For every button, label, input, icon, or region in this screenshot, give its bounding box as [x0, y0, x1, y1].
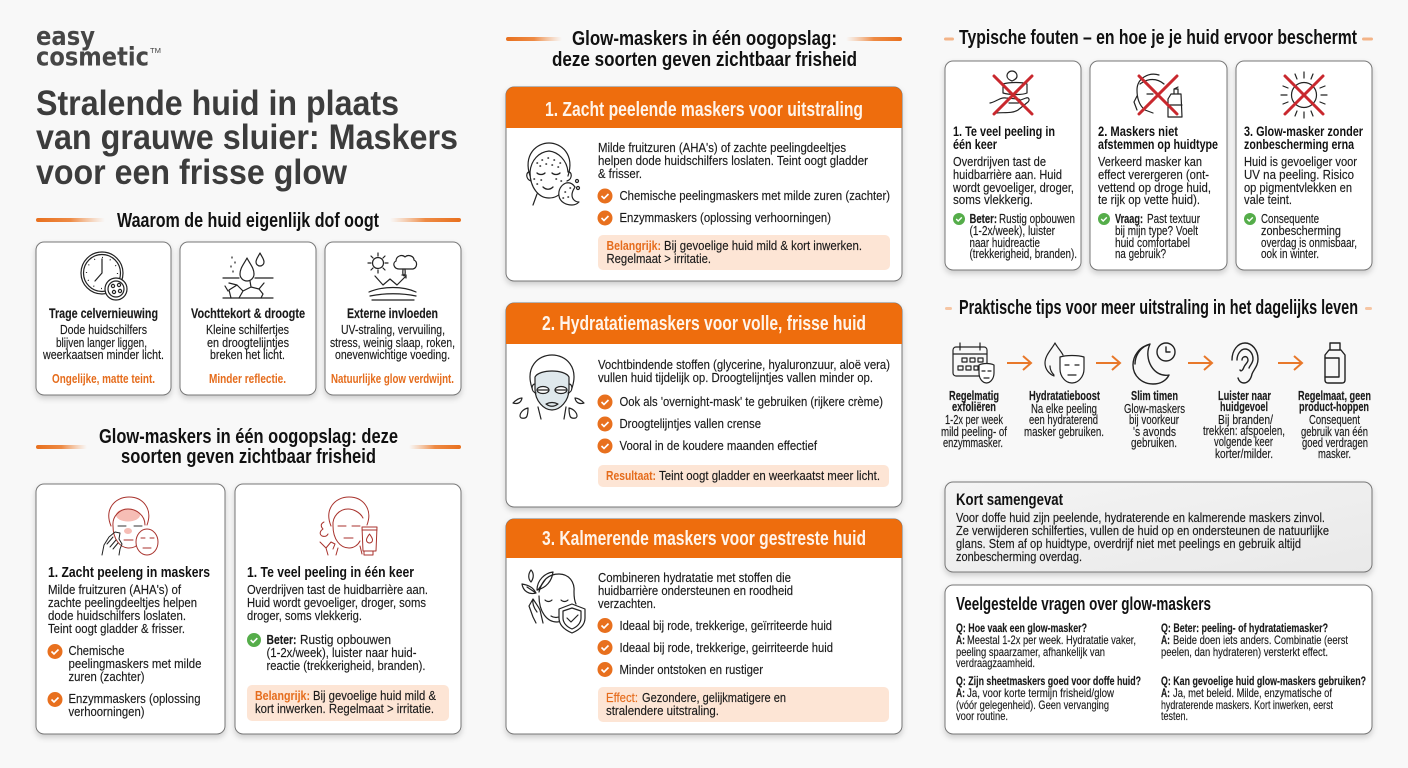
title [36, 84, 458, 192]
heading: glow-maskers links [36, 426, 461, 468]
panel: trage celvernieuwing: weerkaatsen minder licht. [42, 347, 164, 362]
icon: face with peeling dots and pad [527, 143, 580, 205]
tip 5: regelmaat, geen product-hoppen: masker. [1318, 447, 1351, 461]
logo: easy cosmetic: TM [150, 48, 161, 55]
panel: fout 2: Verkeerd masker kan [1098, 154, 1202, 169]
panel: zacht peeleng in maskers: peelingmaskers met milde [68, 656, 202, 671]
header bar 2 [506, 303, 902, 344]
title: Stralende huid in plaats [36, 84, 399, 123]
faq 4: hydraterende maskers. Kort inwerken, eerst [1161, 698, 1333, 712]
faq 3: peelen, dan hydrateren) versterkt effect. [1161, 645, 1328, 659]
callout: belangrijk midden: Regelmaat > irritatie. [606, 251, 711, 266]
heading: glow-maskers links: soorten geven zichtbaar frisheid [121, 446, 376, 468]
header bar 1: 1. Zacht peelende maskers voor uitstraling [545, 99, 863, 121]
panel: fout 1: Rustig opbouwen [999, 212, 1075, 226]
panel: kort samengevat: Ze verwijderen schilferties, vullen de huid op en ondersteunen de natuurlijke [956, 523, 1329, 538]
panel: zacht peeleng in maskers: dode huidschilfers loslaten. [48, 608, 186, 623]
callout: resultaat: Resultaat: [606, 468, 656, 483]
icon: face with leaves and shield [522, 570, 585, 633]
panel: hydratatiemaskers: Vooral in de koudere maanden effectief [620, 438, 817, 453]
faq 4: Ja, met beleid. Milde, enzymatische of [1173, 686, 1333, 700]
panel: trage celvernieuwing [36, 242, 171, 395]
panel: zacht peeleng in maskers: Milde fruitzuren (AHA's) of [48, 582, 181, 597]
panel: fout 1 [945, 61, 1081, 270]
panel: zacht peelende maskers: Milde fruitzuren (AHA's) of zachte peelingdeeltjes [598, 140, 846, 155]
panel: kalmerende maskers [506, 519, 902, 734]
panel: te veel peeling in een keer: Huid wordt gevoeliger, droger, soms [247, 595, 426, 610]
faq 3: Q: Beter: peeling- of hydratatiemasker? [1161, 621, 1328, 635]
arrow 3 [1188, 356, 1212, 370]
panel: kalmerende maskers: huidbarrière ondersteunen en roodheid [598, 583, 793, 598]
icon: face and bottle crossed out [1134, 74, 1182, 117]
tip 5: regelmaat, geen product-hoppen: Consequent [1309, 413, 1360, 427]
panel: hydratatiemaskers [506, 303, 902, 507]
callout: belangrijk: kort inwerken. Regelmaat > irritatie. [255, 701, 434, 716]
panel: te veel peeling in een keer: Beter: [266, 632, 296, 647]
icon: hand with jar crossed out [990, 71, 1032, 114]
callout: belangrijk midden [598, 235, 890, 270]
panel: te veel peeling in een keer: Overdrijven tast de huidbarrière aan. [247, 582, 428, 597]
tip 3: slim timen: Slim timen [1131, 389, 1178, 403]
callout: effect: stralendere uitstraling. [606, 703, 719, 718]
tip 1: regelmatig exfoliëren [941, 343, 1007, 450]
heading: waarom de huid dof oogt: Waarom de huid eigenlijk dof oogt [117, 210, 379, 232]
callout: belangrijk [247, 685, 449, 721]
faq 1: Meestal 1-2x per week. Hydratatie vaker, [967, 633, 1136, 647]
icon: face with hydrating mask and drops [513, 355, 584, 419]
tip 4: luister naar huidgevoel: Luister naar [1218, 389, 1271, 403]
panel: fout 3: overdag is onmisbaar, [1261, 236, 1357, 250]
panel: fout 1: naar huidreactie [970, 236, 1040, 250]
panel: zacht peeleng in maskers: Enzymmaskers (oplossing [68, 691, 200, 706]
panel: fout 3: UV na peeling. Risico [1244, 167, 1354, 182]
icon: drop with mask [1045, 343, 1084, 383]
header bar 3 [506, 519, 902, 558]
panel: fout 3: zonbescherming erna [1244, 137, 1354, 152]
panel: zacht peelende maskers: Enzymmaskers (oplossing verhoorningen) [620, 210, 831, 225]
faq 2: voor routine. [956, 709, 1008, 723]
callout: belangrijk midden: Belangrijk: [606, 238, 661, 253]
tip 1: regelmatig exfoliëren: mild peeling- of [941, 425, 1007, 439]
panel: fout 1: (trekkerigheid, branden). [970, 247, 1077, 261]
faq 2 [956, 674, 1141, 723]
panel: fout 2: Past textuur [1147, 212, 1200, 226]
panel: externe invloeden: stress, weinig slaap, roken, [330, 335, 455, 350]
arrow 1 [1007, 356, 1031, 370]
heading: glow-maskers midden: deze soorten geven zichtbaar frisheid [552, 49, 857, 71]
tip 2: hydratatieboost [1024, 343, 1104, 439]
panel: kalmerende maskers: verzachten. [598, 596, 656, 611]
panel: fout 2: na gebruik? [1115, 247, 1166, 261]
panel: hydratatiemaskers: Droogtelijntjes vallen crense [620, 416, 761, 431]
panel: fout 2: 2. Maskers niet [1098, 124, 1178, 139]
panel: te veel peeling in een keer: (1-2x/week), luister naar huid- [266, 645, 416, 660]
panel: zacht peelende maskers: & frisser. [598, 166, 642, 181]
arrow 2 [1096, 356, 1120, 370]
panel: fout 3: op pigmentvlekken en [1244, 180, 1352, 195]
panel: kort samengevat: Voor doffe huid zijn peelende, hydraterende en kalmerende maskers zinvol. [956, 510, 1325, 525]
tip 5: regelmaat, geen product-hoppen [1298, 343, 1371, 461]
icon: bottle [1325, 343, 1345, 383]
panel: externe invloeden: Natuurlijke glow verdwijnt. [331, 371, 454, 386]
tip 2: hydratatieboost: een hydraterend [1029, 413, 1098, 427]
panel: zacht peelende maskers: helpen dode huidschilfers loslaten. Teint oogt gladder [598, 153, 869, 168]
tip 5: regelmaat, geen product-hoppen: product-hoppen [1299, 400, 1369, 414]
panel: fout 2: te rijk op vette huid). [1098, 192, 1200, 207]
tip 3: slim timen [1124, 343, 1185, 450]
callout: belangrijk: Belangrijk: [255, 688, 310, 703]
faq 1 [956, 621, 1136, 670]
panel: externe invloeden: Externe invloeden [347, 306, 438, 321]
tip 4: luister naar huidgevoel [1203, 343, 1285, 461]
arrow 4 [1278, 356, 1302, 370]
tip 1: regelmatig exfoliëren: 1-2x per week [945, 413, 1004, 427]
panel: fout 2: bij mijn type? Voelt [1115, 224, 1198, 238]
panel: vochttekort en droogte: Minder reflectie. [209, 371, 286, 386]
panel: fout 1: 1. Te veel peeling in [953, 124, 1055, 139]
panel: te veel peeling in een keer: reactie (trekkerigheid, branden). [266, 658, 426, 673]
panel: vochttekort en droogte: Kleine schilfertjes [206, 322, 289, 337]
panel: fout 2: vettend op droge huid, [1098, 180, 1211, 195]
callout: effect: Effect: [606, 690, 638, 705]
icon: red face with tube and leaves [320, 497, 377, 555]
faq 2: Q: Zijn sheetmaskers goed voor doffe huid? [956, 674, 1141, 688]
panel: zacht peeleng in maskers: Chemische [68, 643, 124, 658]
icon: clock with cells [81, 252, 127, 300]
panel: trage celvernieuwing: Trage celvernieuwing [49, 306, 158, 321]
panel: hydratatiemaskers: Ook als 'overnight-mask' te gebruiken (rijkere crème) [620, 394, 883, 409]
icon: calendar with mask [953, 343, 994, 383]
panel: vochttekort en droogte: breken het licht. [210, 347, 285, 362]
tip 2: hydratatieboost: Na elke peeling [1031, 402, 1097, 416]
panel: fout 2: huid comfortabel [1115, 236, 1190, 250]
tip 1: regelmatig exfoliëren: exfoliëren [952, 400, 996, 414]
heading: glow-maskers midden: Glow-maskers in één oogopslag: [572, 28, 837, 50]
panel: vochttekort en droogte [180, 242, 316, 395]
tip 2: hydratatieboost: Hydratatieboost [1029, 389, 1101, 403]
panel: fout 3 [1236, 61, 1372, 270]
tip 4: luister naar huidgevoel: volgende keer [1214, 435, 1273, 449]
tip 5: regelmaat, geen product-hoppen: Regelmaat, geen [1298, 389, 1371, 403]
panel: trage celvernieuwing: blijven langer liggen, [56, 335, 147, 350]
panel: fout 1: huidbarrière aan. Huid [953, 167, 1062, 182]
panel: externe invloeden [325, 242, 461, 395]
icon: ear [1232, 343, 1258, 383]
panel: fout 3: 3. Glow-masker zonder [1244, 124, 1364, 139]
heading: glow-maskers midden [506, 28, 902, 71]
panel: zacht peeleng in maskers: verhoorningen) [68, 704, 144, 719]
panel: zacht peeleng in maskers: 1. Zacht peeleng in maskers [48, 565, 210, 581]
panel: kalmerende maskers: Ideaal bij rode, trekkerige, geirriteerde huid [620, 640, 833, 655]
panel: zacht peeleng in maskers: Teint oogt gladder & frisser. [48, 621, 185, 636]
faq 4 [1161, 674, 1366, 723]
panel: fout 1: één keer [953, 137, 998, 152]
panel: fout 1: soms vlekkerig. [953, 192, 1033, 207]
callout: resultaat: Teint oogt gladder en weerkaatst meer licht. [659, 468, 880, 483]
panel: fout 1: Beter: [970, 212, 997, 226]
tip 3: slim timen: Glow-maskers [1124, 402, 1185, 416]
faq 1: verdraagzaamheid. [956, 656, 1035, 670]
panel: veelgestelde vragen [945, 585, 1372, 734]
heading: glow-maskers links: Glow-maskers in één oogopslag: deze [99, 426, 398, 448]
panel: fout 2: effect verergeren (ont- [1098, 167, 1209, 182]
faq 4: A: [1161, 686, 1170, 700]
tip 4: luister naar huidgevoel: trekken: afspoelen, [1203, 424, 1285, 438]
panel: te veel peeling in een keer: 1. Te veel peeling in één keer [247, 565, 414, 581]
panel: kort samengevat: glans. Stem af op huidtype, overdrijf niet met peelings en gebruik altijd [956, 536, 1301, 551]
panel: fout 2 [1090, 61, 1227, 270]
panel: zacht peelende maskers [506, 87, 902, 281]
panel: te veel peeling in een keer: Rustig opbouwen [300, 632, 391, 647]
panel: veelgestelde vragen: Veelgestelde vragen over glow-maskers [956, 594, 1211, 614]
header bar 2: 2. Hydratatiemaskers voor volle, frisse huid [542, 313, 866, 335]
panel: vochttekort en droogte: Vochttekort & droogte [191, 306, 305, 321]
icon: sun, cloud and skin [368, 253, 417, 300]
faq 2: Ja, voor korte termijn frisheid/glow [967, 686, 1114, 700]
panel: vochttekort en droogte: en droogtelijntjes [207, 335, 289, 350]
logo: easy cosmetic: cosmetic [36, 42, 149, 72]
icon: sun crossed out [1281, 72, 1327, 118]
faq 1: A: [956, 633, 965, 647]
tip 1: regelmatig exfoliëren: enzymmasker. [943, 436, 1003, 450]
panel: kort samengevat [945, 482, 1372, 572]
panel: hydratatiemaskers: Vochtbindende stoffen (glycerine, hyaluronzuur, aloë vera) [598, 357, 890, 372]
tip 3: slim timen: bij voorkeur [1129, 413, 1179, 427]
tip 4: luister naar huidgevoel: huidgevoel [1220, 400, 1268, 414]
panel: externe invloeden: onevenwichtige voeding. [335, 347, 450, 362]
callout: effect: Gezondere, gelijkmatigere en [642, 690, 786, 705]
title: voor een frisse glow [36, 153, 348, 192]
callout: belangrijk midden: Bij gevoelige huid mild & kort inwerken. [664, 238, 862, 253]
panel: fout 3: zonbescherming [1261, 224, 1341, 238]
panel: fout 1: (1-2x/week), luister [970, 224, 1055, 238]
icon: moon with clock [1133, 343, 1175, 384]
tip 1: regelmatig exfoliëren: Regelmatig [949, 389, 999, 403]
tip 5: regelmaat, geen product-hoppen: goed verdragen [1302, 436, 1368, 450]
callout: effect [598, 687, 889, 722]
tip 3: slim timen: gebruiken. [1131, 436, 1177, 450]
panel: zacht peeleng in maskers: zachte peelingdeeltjes helpen [48, 595, 197, 610]
logo: easy cosmetic [36, 22, 161, 72]
panel: trage celvernieuwing: Dode huidschilfers [60, 322, 147, 337]
panel: te veel peeling in een keer: droger, soms vlekkerig. [247, 608, 362, 623]
panel: zacht peelende maskers: Chemische peelingmaskers met milde zuren (zachter) [620, 188, 890, 203]
tip 5: regelmaat, geen product-hoppen: gebruik van één [1301, 425, 1368, 439]
faq 3: A: [1161, 633, 1170, 647]
tip 4: luister naar huidgevoel: korter/milder. [1215, 447, 1273, 461]
faq 1: Q: Hoe vaak een glow-masker? [956, 621, 1087, 635]
faq 3: Beide doen iets anders. Combinatie (eerst [1173, 633, 1349, 647]
panel: kort samengevat: Kort samengevat [956, 490, 1063, 509]
title: van grauwe sluier: Maskers [36, 118, 458, 157]
panel: fout 2: Vraag: [1115, 212, 1143, 226]
callout: belangrijk: Bij gevoelige huid mild & [313, 688, 436, 703]
icon: red face with sheet mask and hand [102, 497, 158, 555]
panel: trage celvernieuwing: Ongelijke, matte teint. [52, 371, 155, 386]
panel: kalmerende maskers: Minder ontstoken en rustiger [620, 662, 764, 677]
panel: fout 1: Overdrijven tast de [953, 154, 1046, 169]
faq 1: peeling spaarzamer, afhankelijk van [956, 645, 1105, 659]
callout: resultaat [598, 465, 889, 487]
panel: fout 3: Huid is gevoeliger voor [1244, 154, 1358, 169]
panel: fout 3: ook in winter. [1261, 247, 1319, 261]
tip 4: luister naar huidgevoel: Bij branden/ [1218, 413, 1273, 427]
panel: hydratatiemaskers: vullen huid tijdelijk op. Droogtelijntjes vallen minder op. [598, 370, 873, 385]
panel: te veel peeling in een keer [235, 484, 461, 734]
panel: zacht peeleng in maskers [36, 484, 225, 734]
logo: easy cosmetic: easy [36, 22, 95, 52]
header bar 1 [506, 87, 902, 128]
panel: kort samengevat: zonbescherming overdag. [956, 549, 1082, 564]
icon: water drops on dry skin [223, 253, 273, 298]
faq 3 [1161, 621, 1349, 659]
faq 4: testen. [1161, 709, 1188, 723]
faq 2: A: [956, 686, 965, 700]
panel: externe invloeden: UV-straling, vervuiling, [341, 322, 445, 337]
panel: fout 2: afstemmen op huidtype [1098, 137, 1218, 152]
faq 2: (vóór gelegenheid). Geen vervanging [956, 698, 1109, 712]
panel: fout 3: Consequente [1261, 212, 1319, 226]
tip 3: slim timen: 's avonds [1133, 425, 1176, 439]
panel: fout 1: wordt gevoeliger, droger, [952, 180, 1074, 195]
panel: fout 3: vale teint. [1244, 192, 1292, 207]
panel: kalmerende maskers: Combineren hydratatie met stoffen die [598, 570, 791, 585]
header bar 3: 3. Kalmerende maskers voor gestreste huid [542, 528, 866, 550]
panel: zacht peeleng in maskers: zuren (zachter) [68, 669, 144, 684]
tip 2: hydratatieboost: masker gebruiken. [1024, 425, 1104, 439]
panel: kalmerende maskers: Ideaal bij rode, trekkerige, geïrriteerde huid [620, 618, 832, 633]
